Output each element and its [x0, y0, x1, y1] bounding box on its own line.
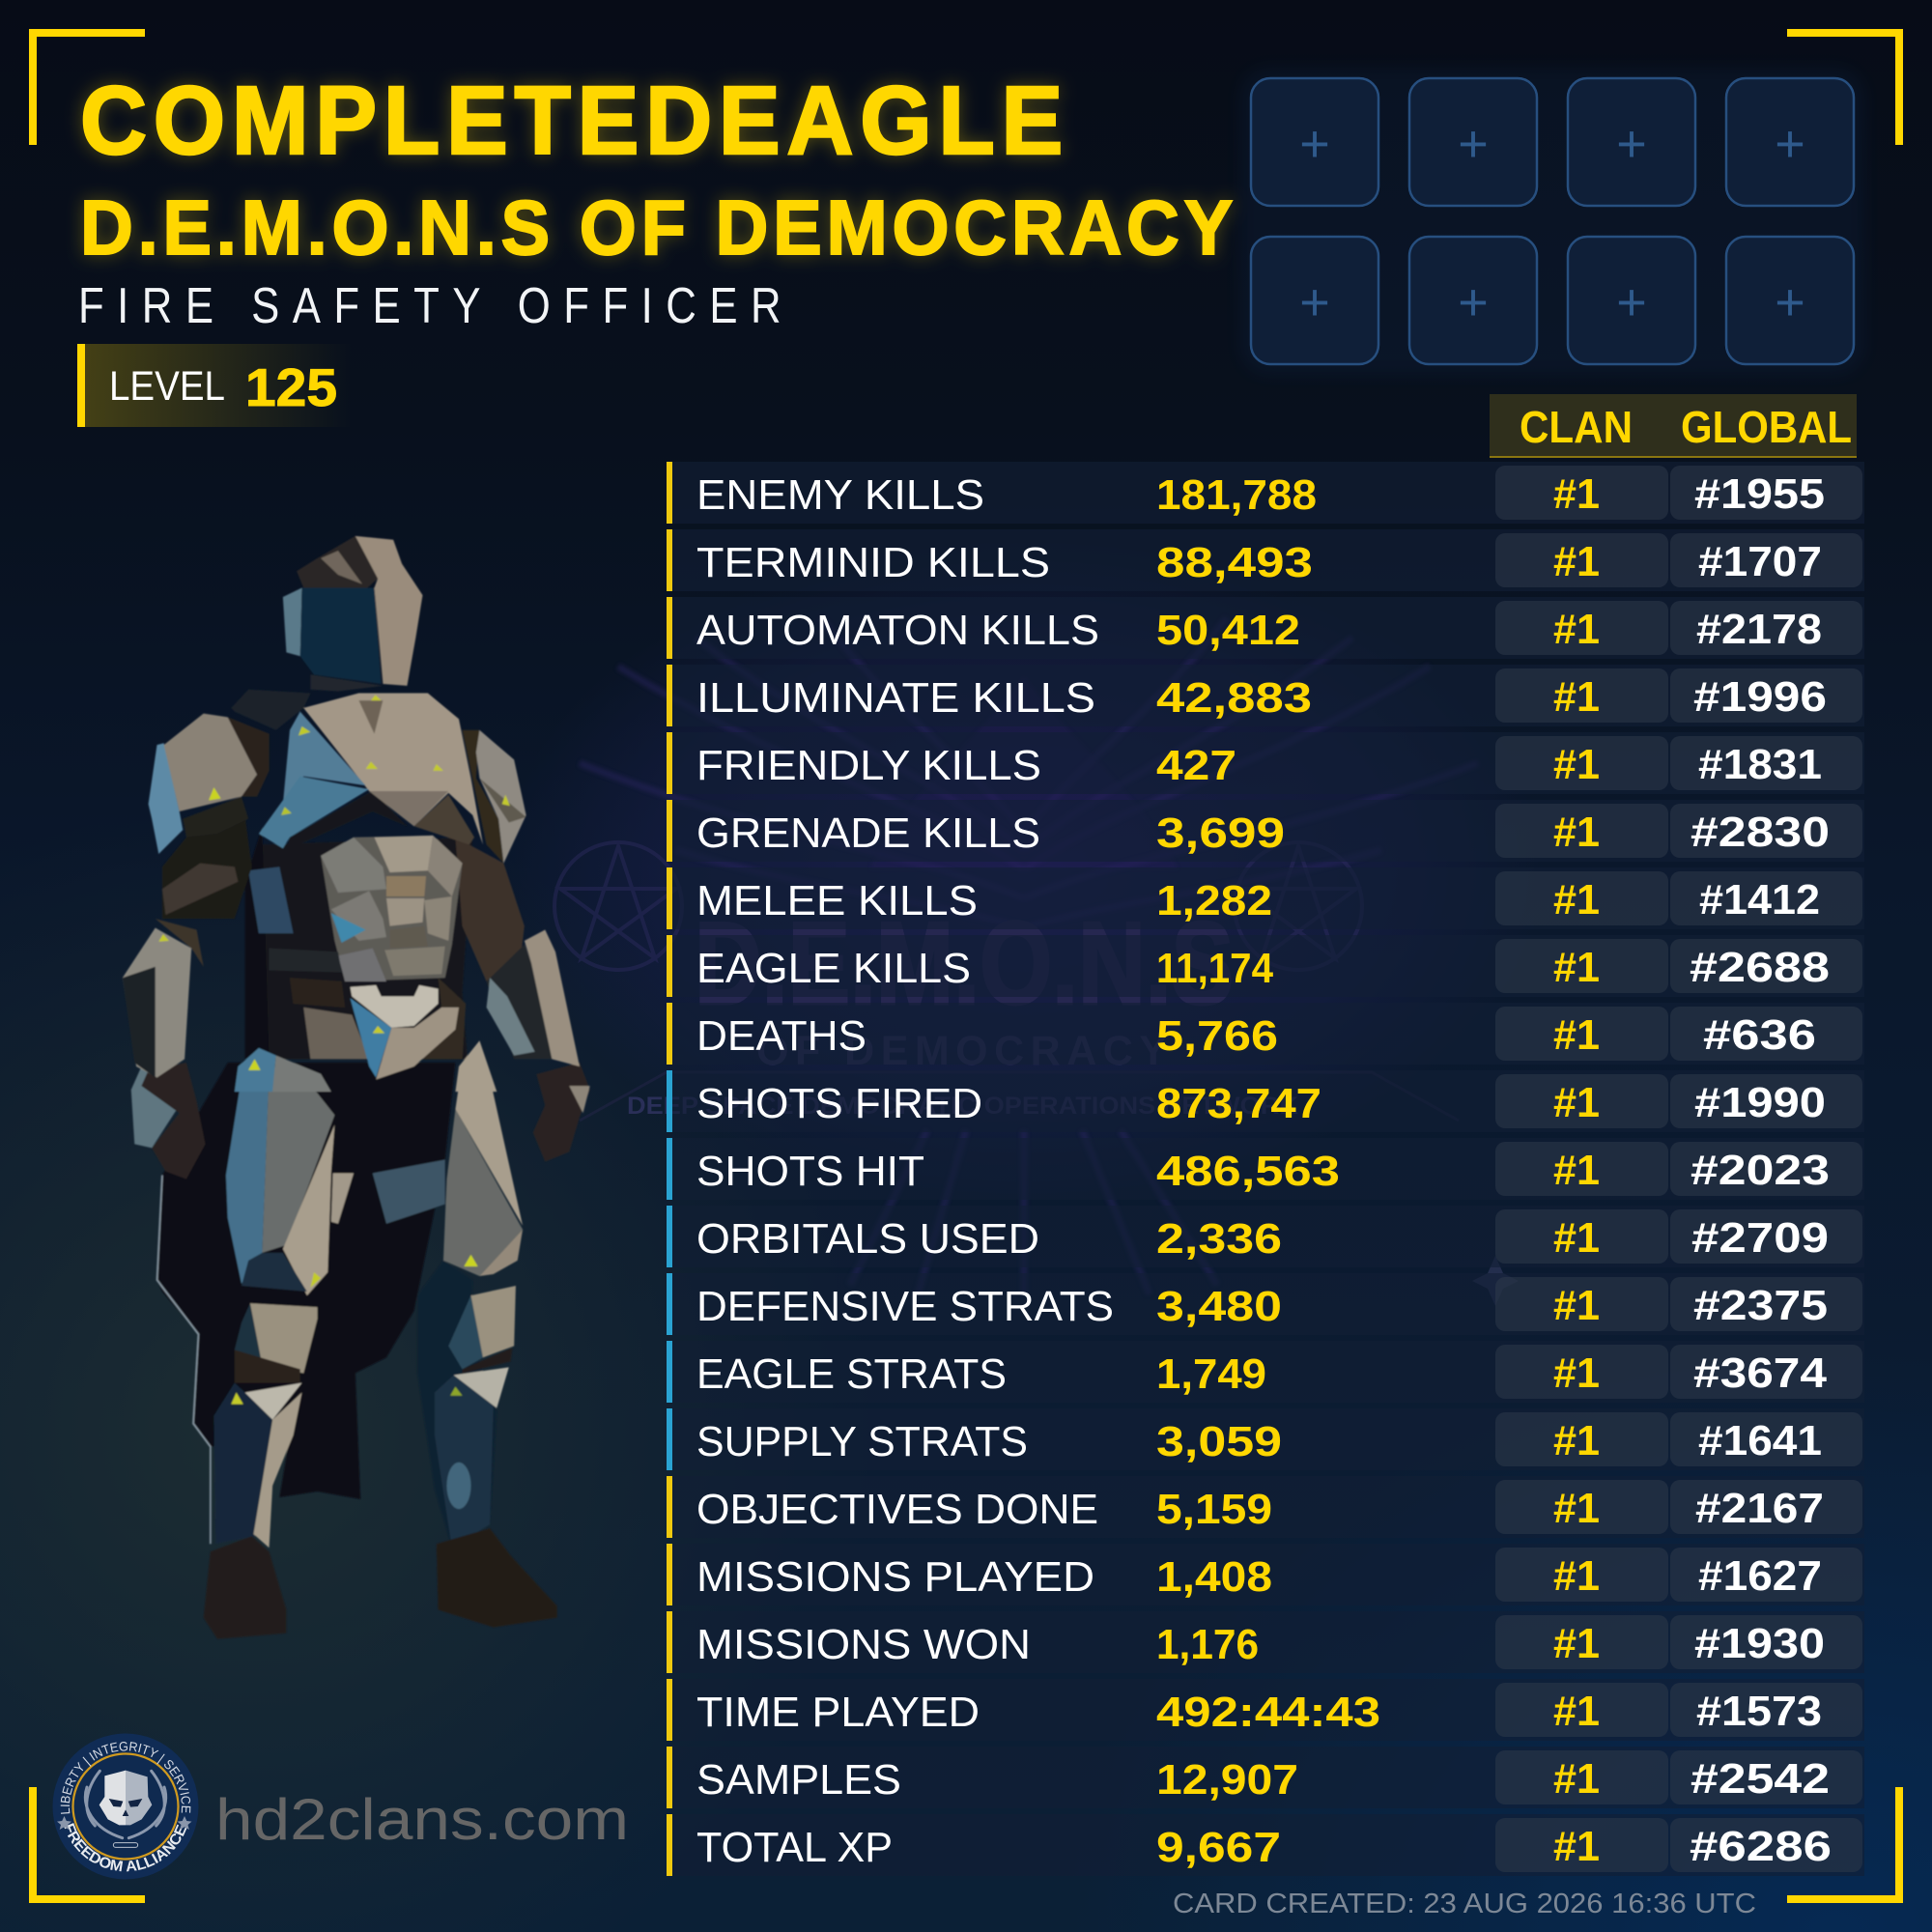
row: grenade kills: #1 [1553, 809, 1600, 856]
slot 6: + [1458, 273, 1489, 331]
row: eagle kills: #1 [1553, 944, 1600, 991]
panel: empty badge slots [1240, 68, 1864, 375]
arms [162, 815, 252, 919]
row: samples: 12,907 [1156, 1756, 1298, 1804]
row: automaton kills: #1 [1553, 606, 1600, 653]
row: grenade kills: #2830 [1690, 809, 1830, 856]
row: illuminate kills: ILLUMINATE KILLS [696, 674, 1095, 722]
row: shots hit: #1 [1553, 1147, 1600, 1194]
row: enemy kills: ENEMY KILLS [696, 471, 984, 519]
corner bracket: top left [29, 29, 145, 145]
chest plates [231, 690, 310, 730]
row: missions won [667, 1611, 1864, 1673]
slot 7 [1568, 237, 1695, 364]
heading: player title: FIRE SAFETY OFFICER [78, 278, 794, 334]
row: total xp [667, 1814, 1864, 1876]
row: supply strats: #1 [1553, 1417, 1600, 1464]
row: shots fired [667, 1070, 1864, 1132]
row: friendly kills: 427 [1156, 742, 1236, 789]
slot 3 [1568, 78, 1695, 206]
row: friendly kills: FRIENDLY KILLS [696, 742, 1041, 789]
row: melee kills: #1412 [1699, 876, 1820, 923]
right forearm [487, 945, 552, 1059]
row: shots fired: #1 [1553, 1079, 1600, 1126]
left forearm [123, 928, 191, 1078]
row: missions won: MISSIONS WON [696, 1621, 1031, 1668]
slot 8 [1726, 237, 1854, 364]
left glove [141, 1063, 205, 1179]
row: friendly kills: #1831 [1698, 741, 1822, 788]
row: eagle strats: #1 [1553, 1350, 1600, 1397]
row: defensive strats: DEFENSIVE STRATS [696, 1283, 1114, 1330]
row: automaton kills: #2178 [1696, 606, 1822, 653]
row: illuminate kills: #1996 [1693, 673, 1827, 721]
corner bracket: bottom left [29, 1787, 145, 1903]
row: missions won: 1,176 [1156, 1621, 1259, 1668]
row: samples [667, 1747, 1864, 1808]
row: eagle strats: 1,749 [1156, 1350, 1266, 1398]
cloak [156, 1063, 455, 1499]
markers [231, 1393, 243, 1405]
corner bracket: top right [1787, 29, 1903, 145]
row: supply strats: 3,059 [1156, 1418, 1282, 1465]
logo: bottom name: FREEDOM ALLIANCE [64, 1823, 187, 1872]
row: shots hit: SHOTS HIT [696, 1148, 924, 1195]
row: enemy kills [667, 462, 1864, 524]
row: missions played [667, 1544, 1864, 1605]
row: deaths: #1 [1553, 1011, 1600, 1059]
slot 3: + [1616, 115, 1647, 173]
cape strip [248, 867, 294, 933]
row: illuminate kills: #1 [1553, 673, 1600, 721]
row: friendly kills: #1 [1553, 741, 1600, 788]
logo: skull and laurels [85, 1771, 166, 1847]
row: missions played: #1627 [1698, 1552, 1822, 1600]
row: defensive strats: #1 [1553, 1282, 1600, 1329]
row: deaths: DEATHS [696, 1012, 867, 1060]
row: objectives done: #1 [1553, 1485, 1600, 1532]
row: missions won: #1 [1553, 1620, 1600, 1667]
left shin [213, 1382, 272, 1544]
table header: clan and global: GLOBAL [1681, 402, 1852, 452]
row: grenade kills: 3,699 [1156, 810, 1285, 857]
soldier: torso and head [123, 536, 580, 1092]
left boot [204, 1536, 286, 1639]
left gauntlet [131, 1063, 180, 1148]
slot 2: + [1458, 115, 1489, 173]
logo: stars [57, 1816, 191, 1830]
row: objectives done: #2167 [1695, 1485, 1824, 1532]
row: objectives done [667, 1476, 1864, 1538]
row: samples: #2542 [1690, 1755, 1830, 1803]
row: melee kills: #1 [1553, 876, 1600, 923]
row: shots hit: 486,563 [1156, 1148, 1340, 1195]
watermark: left pentagram [554, 842, 682, 970]
slot 2 [1409, 78, 1537, 206]
row: total xp: TOTAL XP [696, 1824, 893, 1871]
row: time played [667, 1679, 1864, 1741]
row: deaths: 5,766 [1156, 1012, 1278, 1060]
row: supply strats: SUPPLY STRATS [696, 1418, 1028, 1465]
slot 5 [1251, 237, 1378, 364]
torso underlayer [248, 838, 472, 1059]
watermark: of democracy: OF DEMOCRACY [756, 1028, 1167, 1074]
table header: clan and global: CLAN [1520, 402, 1633, 452]
slot 8: + [1775, 273, 1805, 331]
row: total xp: #1 [1553, 1823, 1600, 1870]
row: enemy kills: #1 [1553, 470, 1600, 518]
row: shots fired: SHOTS FIRED [696, 1080, 982, 1127]
row: shots hit: #2023 [1690, 1147, 1830, 1194]
armor markers [209, 787, 221, 801]
row: orbitals used: ORBITALS USED [696, 1215, 1039, 1263]
left knee [235, 1303, 262, 1365]
row: shots fired: 873,747 [1156, 1080, 1321, 1127]
belt band [373, 1159, 445, 1224]
footer: card created timestamp: CARD CREATED: 23 AUG 2026 16:36 UTC [1173, 1889, 1756, 1919]
brand: hd2clans.com: hd2clans.com [215, 1787, 629, 1852]
row: eagle kills: 11,174 [1156, 945, 1273, 992]
row: objectives done: 5,159 [1156, 1486, 1272, 1533]
row: illuminate kills [667, 665, 1864, 726]
row: time played: #1573 [1696, 1688, 1822, 1735]
row: samples: #1 [1553, 1755, 1600, 1803]
table header: clan and global [1490, 394, 1857, 458]
row: enemy kills: #1955 [1694, 470, 1825, 518]
row: defensive strats: #2375 [1693, 1282, 1828, 1329]
row: terminid kills: TERMINID KILLS [696, 539, 1050, 586]
illustration: armored soldier [123, 536, 590, 1639]
row: orbitals used: #2709 [1691, 1214, 1829, 1262]
row: eagle kills [667, 935, 1864, 997]
row: samples: SAMPLES [696, 1756, 901, 1804]
row: grenade kills: GRENADE KILLS [696, 810, 1040, 857]
slot 6 [1409, 237, 1537, 364]
row: enemy kills: 181,788 [1156, 471, 1317, 519]
left shoulder [149, 743, 183, 854]
row: friendly kills [667, 732, 1864, 794]
row: terminid kills: 88,493 [1156, 539, 1313, 586]
row: supply strats: #1641 [1698, 1417, 1822, 1464]
row: missions played: #1 [1553, 1552, 1600, 1600]
row: total xp: 9,667 [1156, 1824, 1281, 1871]
row: terminid kills: #1707 [1698, 538, 1822, 585]
level badge [77, 344, 353, 427]
slot 4 [1726, 78, 1854, 206]
row: time played: #1 [1553, 1688, 1600, 1735]
row: shots hit [667, 1138, 1864, 1200]
level badge: 125 [245, 357, 337, 417]
row: orbitals used: 2,336 [1156, 1215, 1282, 1263]
watermark: sparkle [1472, 1256, 1519, 1306]
slot 1: + [1299, 115, 1330, 173]
row: eagle kills: #2688 [1690, 944, 1830, 991]
row: missions won: #1930 [1694, 1620, 1825, 1667]
row: total xp: #6286 [1690, 1823, 1832, 1870]
row: melee kills: MELEE KILLS [696, 877, 978, 924]
row: melee kills: 1,282 [1156, 877, 1272, 924]
abdomen plates [321, 836, 463, 981]
row: automaton kills: AUTOMATON KILLS [696, 607, 1099, 654]
watermark: tagline: DEEP SPACE DEMOCRATIC OPERATIONS NETWORK [627, 1093, 1298, 1120]
soldier: legs and cloak [131, 1063, 590, 1639]
row: supply strats [667, 1408, 1864, 1470]
row: deaths [667, 1003, 1864, 1065]
logo: top motto: LIBERTY | INTEGRITY | SERVICE [60, 1742, 191, 1814]
helmet [297, 536, 378, 587]
right glove [533, 1063, 590, 1161]
left thigh plate [226, 1066, 270, 1284]
corner bracket: bottom right [1787, 1787, 1903, 1903]
row: grenade kills [667, 800, 1864, 862]
watermark: clan name: D.E.M.O.N.S [695, 897, 1234, 1029]
row: orbitals used: #1 [1553, 1214, 1600, 1262]
row: melee kills [667, 867, 1864, 929]
watermark: right pentagram [1235, 842, 1362, 970]
row: terminid kills [667, 529, 1864, 591]
row: eagle strats: EAGLE STRATS [696, 1350, 1007, 1398]
heading: clan name: D.E.M.O.N.S OF DEMOCRACY [80, 185, 1237, 270]
right shoulder [463, 730, 503, 864]
slot 1 [1251, 78, 1378, 206]
row: eagle kills: EAGLE KILLS [696, 945, 971, 992]
row: time played: 492:44:43 [1156, 1689, 1380, 1736]
neck [310, 674, 383, 692]
level badge: LEVEL [109, 363, 225, 410]
title: player name: COMPLETEDEAGLE [80, 67, 1069, 175]
slot 7: + [1616, 273, 1647, 331]
panel: stats table [667, 462, 1864, 1876]
right shin [435, 1375, 494, 1548]
row: eagle strats: #3674 [1693, 1350, 1828, 1397]
row: shots fired: #1990 [1694, 1079, 1826, 1126]
row: eagle strats [667, 1341, 1864, 1403]
watermark: D.E.M.O.N.S emblem [502, 541, 1546, 1306]
row: deaths: #636 [1703, 1011, 1816, 1059]
row: defensive strats: 3,480 [1156, 1283, 1282, 1330]
row: terminid kills: #1 [1553, 538, 1600, 585]
slot 4: + [1775, 115, 1805, 173]
row: missions played: 1,408 [1156, 1553, 1272, 1601]
slot 5: + [1299, 273, 1330, 331]
row: defensive strats [667, 1273, 1864, 1335]
row: time played: TIME PLAYED [696, 1689, 980, 1736]
row: automaton kills [667, 597, 1864, 659]
row: orbitals used [667, 1206, 1864, 1267]
logo: freedom alliance emblem [52, 1733, 199, 1880]
belt [270, 949, 342, 972]
right boot [437, 1528, 557, 1628]
row: missions played: MISSIONS PLAYED [696, 1553, 1094, 1601]
right thigh plate [443, 1109, 523, 1276]
right knee [448, 1295, 483, 1369]
row: objectives done: OBJECTIVES DONE [696, 1486, 1098, 1533]
row: automaton kills: 50,412 [1156, 607, 1300, 654]
hips [290, 978, 345, 1008]
row: illuminate kills: 42,883 [1156, 674, 1312, 722]
right leg [417, 1261, 497, 1548]
